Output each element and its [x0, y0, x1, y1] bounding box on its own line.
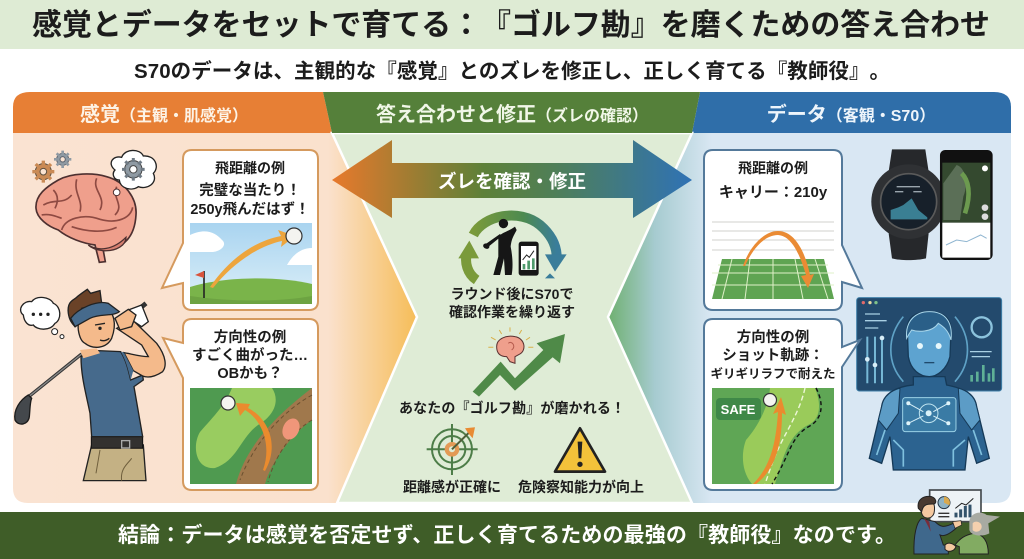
- header: data: データ（客観・S70）: [767, 102, 935, 126]
- arm: [117, 320, 165, 377]
- body: [869, 377, 989, 470]
- hands and glove: [128, 305, 148, 327]
- illustration: AI teacher: [857, 298, 1002, 470]
- callout: measured distance: 飛距離の例: [738, 160, 808, 176]
- illustration: golfer: [15, 289, 165, 481]
- title band: [0, 0, 1024, 49]
- callout: felt distance: 250y飛んだはず！: [190, 201, 310, 218]
- phone: [519, 242, 539, 276]
- subtitle: S70のデータは、主観的な『感覚』とのズレを修正し、正しく育てる『教師役』。: [134, 59, 890, 83]
- callout: measured direction: [704, 319, 860, 490]
- arrow: check and correct gap: [332, 140, 692, 218]
- head: [78, 308, 114, 347]
- header: check and correct: 答え合わせと修正（ズレの確認）: [376, 102, 648, 126]
- header: senses: 感覚（主観・肌感覚）: [80, 102, 248, 126]
- panel: check and correct (centre): 確認作業を繰り返す: [449, 304, 575, 320]
- callout: felt distance: [162, 150, 318, 310]
- panel: check and correct (centre): [323, 92, 700, 503]
- arrow: check and correct gap: ズレを確認・修正: [438, 171, 586, 192]
- header: data: [692, 92, 1011, 133]
- header: check and correct: [323, 92, 700, 133]
- icon: growth arrow and brain: [473, 327, 565, 397]
- header: senses: [13, 92, 332, 133]
- callout: felt direction: OBかも？: [217, 365, 283, 382]
- callout: measured distance: キャリー：210y: [719, 184, 828, 201]
- badge: SAFE: SAFE: [721, 402, 756, 417]
- man: [914, 518, 956, 554]
- callout: felt distance: 完璧な当たり！: [199, 181, 301, 199]
- illustration: imagined flight: [190, 223, 312, 304]
- chart: carry trajectory: [712, 222, 834, 299]
- icon: watch and phone: [871, 149, 993, 260]
- panel: data (right): [608, 92, 1011, 503]
- conclusion: 結論：データは感覚を否定せず、正しく育てるための最強の『教師役』なのです。: [118, 523, 896, 547]
- head: [907, 312, 951, 377]
- icon: warning sign: [555, 428, 605, 472]
- callout: felt direction: [163, 319, 318, 490]
- pants: [83, 445, 146, 481]
- illustration: teacher handshake: [914, 490, 1000, 554]
- callout: measured distance: [704, 150, 862, 310]
- callout: felt direction: すごく曲がった…: [192, 346, 308, 364]
- illustration: felt hole map: [190, 388, 312, 484]
- golfer silhouette: [483, 219, 517, 275]
- footer band: [0, 512, 1024, 559]
- chart board: [930, 490, 981, 522]
- title: 感覚とデータをセットで育てる：『ゴルフ勘』を磨くための答え合わせ: [32, 8, 990, 42]
- woman: [955, 533, 988, 554]
- icon: review cycle: [458, 216, 567, 280]
- screen: [857, 298, 1002, 391]
- callout: measured direction: ショット軌跡：: [722, 347, 824, 364]
- illustration: safe shot map: [712, 388, 834, 484]
- text: risk sense: 危険察知能力が向上: [518, 479, 644, 495]
- callout: felt direction: 方向性の例: [214, 328, 286, 346]
- shirt: [81, 351, 143, 437]
- text: distance sense: 距離感が正確に: [403, 479, 501, 495]
- icon: target: [427, 424, 478, 475]
- callout: measured direction: 方向性の例: [737, 328, 809, 346]
- callout: measured direction: ギリギリラフで耐えた: [710, 367, 836, 381]
- text: review: ラウンド後にS70で: [451, 286, 573, 302]
- text: sharpened: あなたの『ゴルフ勘』が磨かれる！: [399, 400, 625, 416]
- callout: felt distance: 飛距離の例: [215, 160, 285, 176]
- icon: brain with gears: [32, 150, 156, 262]
